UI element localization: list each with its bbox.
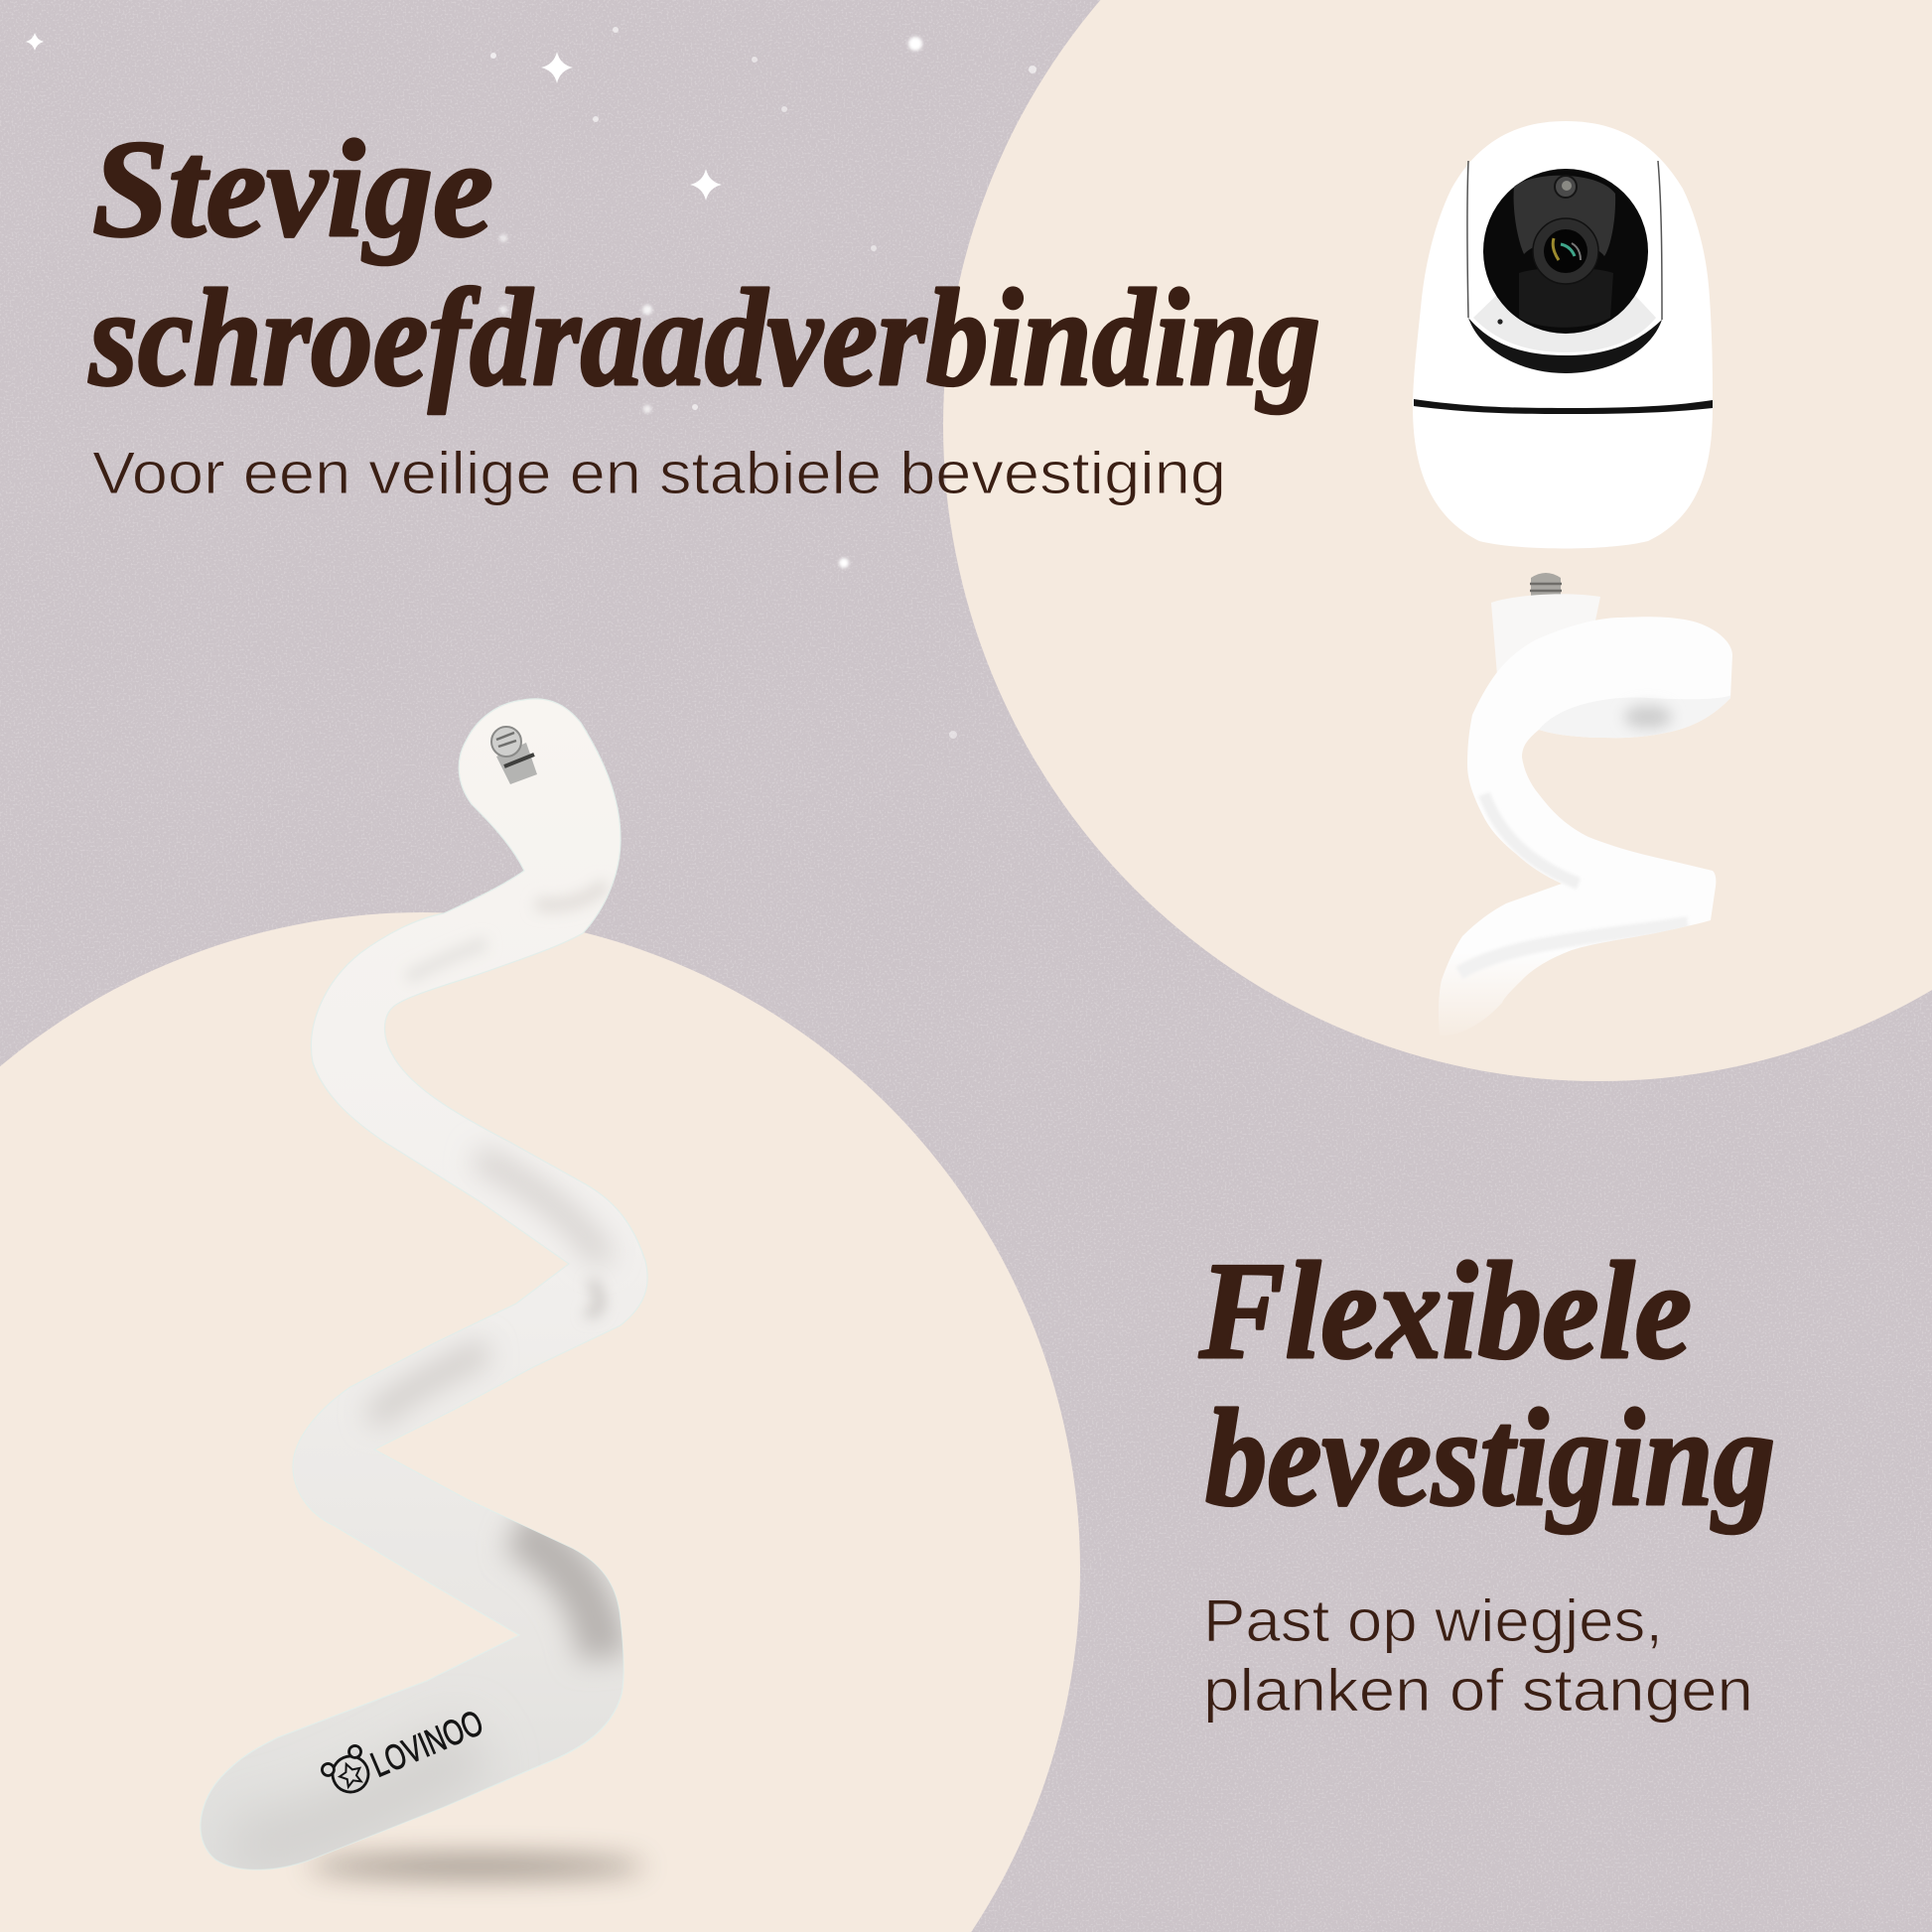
camera indicator dot: [1497, 319, 1503, 325]
logo wordmark: LOVINOO: [365, 1702, 488, 1785]
mount shading: [233, 884, 606, 1847]
camera sensor: [1555, 176, 1577, 198]
product: camera on top: [1413, 121, 1713, 548]
camera lens housing: [1483, 169, 1648, 334]
camera lens: [1533, 218, 1598, 284]
subheading: top: Voor een veilige en stabiele bevestiging: [92, 440, 1226, 506]
decorative sparkles and dots: [26, 27, 1036, 739]
mount stub: [1491, 594, 1600, 675]
product: flexible mount under camera: [1439, 573, 1732, 1035]
ground shadow: [308, 1856, 645, 1877]
camera black band: [1414, 399, 1713, 414]
heading: Flexibele bevestiging: [1198, 1234, 1775, 1535]
body text: bottom right: Past op wiegjes,: [1203, 1587, 1663, 1654]
product: flexible mount, full view: [201, 699, 647, 1869]
body text: bottom right: planken of stangen: [1203, 1657, 1753, 1724]
mount screw thread: [1530, 573, 1562, 606]
heading: Stevige schroefdraadverbinding: schroefdraadverbinding: [88, 261, 1320, 415]
heading: Flexibele bevestiging: bevestiging: [1205, 1381, 1775, 1535]
heading: Stevige schroefdraadverbinding: Stevige: [92, 112, 493, 266]
heading: Stevige schroefdraadverbinding: [88, 112, 1320, 415]
cream circle: top right: [943, 0, 1932, 1081]
body text: bottom right: [1203, 1587, 1753, 1724]
cream circle: bottom left: [0, 912, 1080, 1932]
heading: Flexibele bevestiging: Flexibele: [1198, 1234, 1692, 1388]
camera head seams and lower crescent: [1467, 161, 1662, 373]
mount body: [201, 699, 647, 1869]
brand logo: Lovinoo: [318, 1697, 488, 1804]
logo icon: bear with star: [318, 1744, 375, 1800]
mount bolt: [491, 727, 537, 784]
mount spiral: [1439, 617, 1732, 1035]
camera body: [1413, 121, 1713, 548]
